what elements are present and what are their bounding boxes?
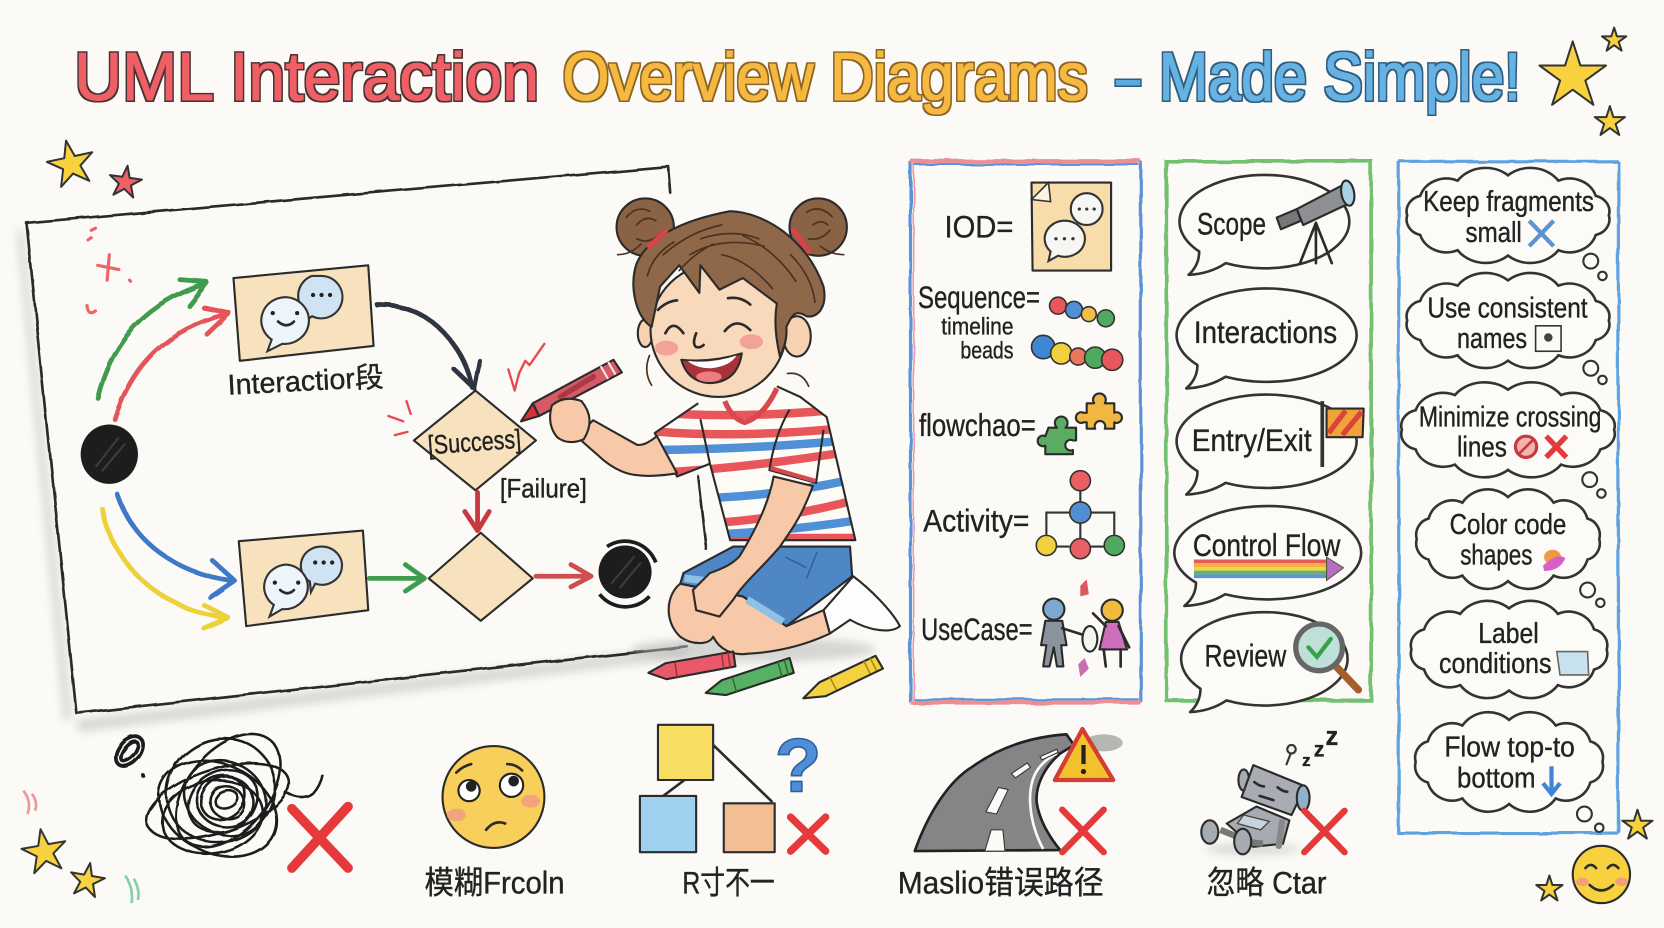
cloud: color code shapes xyxy=(1416,489,1605,607)
green crayon xyxy=(706,658,794,695)
label: R寸不一 xyxy=(682,865,775,901)
bubble: Control Flow xyxy=(1174,506,1361,606)
bubble: Review xyxy=(1181,612,1358,712)
bubble: Interactions xyxy=(1177,288,1357,388)
shorts xyxy=(680,547,852,626)
panel: diagram board xyxy=(17,167,707,732)
timeline beads xyxy=(1032,297,1123,370)
title: – xyxy=(1116,40,1140,115)
interaction fragment 2 xyxy=(239,531,368,626)
cloud: minimize crossing lines: lines xyxy=(1457,431,1507,463)
cloud: keep fragments small: Keep fragments xyxy=(1423,186,1594,218)
cloud: use consistent names: names xyxy=(1457,323,1527,355)
collar xyxy=(725,388,777,422)
head xyxy=(638,263,811,397)
activity row: Activity= xyxy=(923,503,1029,539)
cloud: label conditions: conditions xyxy=(1439,648,1552,680)
sequence row: beads xyxy=(960,338,1013,365)
cloud: use consistent names xyxy=(1407,273,1609,384)
floor crayons xyxy=(648,652,883,698)
hand xyxy=(550,399,590,442)
icon: telescope xyxy=(1277,179,1356,263)
cloud: color code shapes: shapes xyxy=(1460,540,1532,572)
merge diamond xyxy=(429,533,533,621)
floor shadow xyxy=(631,637,876,662)
icon: bottom-right stars and smiley xyxy=(1536,810,1653,903)
flowchart row xyxy=(919,393,1122,454)
arm on knee xyxy=(693,476,813,617)
icon: sleep z letters: z xyxy=(1325,723,1338,751)
cloud: use consistent names: Use consistent xyxy=(1427,292,1588,324)
decision diamond: [Success] xyxy=(427,424,522,460)
panel: definitions xyxy=(911,161,1141,703)
pitfall: tangled scribble xyxy=(110,714,348,875)
pitfall: inconsistent sizes xyxy=(640,724,826,901)
cloud: minimize crossing lines xyxy=(1401,382,1615,498)
drawing arm xyxy=(576,420,677,476)
label: 模糊Frcoln xyxy=(424,865,565,901)
icon: title stars xyxy=(1539,28,1626,135)
cloud: label conditions xyxy=(1411,601,1607,698)
panel frame xyxy=(1399,161,1618,833)
use case row: UseCase= xyxy=(921,611,1033,647)
bubble: Control Flow: Control Flow xyxy=(1193,527,1341,563)
icon: sleep z letters: z xyxy=(1302,751,1311,770)
icon: question mark: ? xyxy=(775,724,821,809)
start node xyxy=(81,424,138,484)
cloud: label conditions: Label xyxy=(1478,618,1539,650)
cloud: flow top to bottom: bottom xyxy=(1457,762,1536,794)
red flow arrow xyxy=(536,565,591,587)
icon: sleep z letters xyxy=(1302,723,1338,770)
icon: warning triangle xyxy=(1055,729,1113,780)
label: 忽略 Ctar xyxy=(1207,865,1327,901)
fragment label: Interactior段 xyxy=(227,362,384,402)
bubble: Entry/Exit xyxy=(1177,395,1364,495)
failure arrow xyxy=(465,492,489,531)
pitfall: ignored start xyxy=(1201,723,1345,901)
cloud: keep fragments small xyxy=(1407,168,1609,280)
icon: sleeping robot xyxy=(1201,745,1310,855)
decision diamond xyxy=(414,391,536,490)
panel: tips thought clouds xyxy=(1399,161,1618,833)
red crayon xyxy=(648,652,735,679)
arrow to decision xyxy=(377,304,480,388)
bubble: Entry/Exit: Entry/Exit xyxy=(1192,422,1312,458)
bubble: Review: Review xyxy=(1204,637,1287,673)
flowchart row: flowchao= xyxy=(919,407,1036,443)
icon: road xyxy=(915,734,1123,851)
icon: worried face xyxy=(443,746,544,848)
failure guard: [Failure] xyxy=(500,474,587,504)
icon: red x xyxy=(1062,810,1104,852)
sequence row: Sequence= xyxy=(918,279,1040,315)
icon: mismatched shapes xyxy=(640,725,775,852)
icon: sleep z letters: z xyxy=(1314,739,1324,762)
icon: red x xyxy=(1304,811,1345,852)
use case row xyxy=(921,579,1129,677)
cloud: flow top to bottom xyxy=(1415,712,1604,832)
icon: red x xyxy=(292,807,348,868)
sequence row xyxy=(918,279,1123,370)
arrows from start xyxy=(98,280,235,628)
right sleeve xyxy=(769,410,824,483)
icon: flag xyxy=(1322,401,1364,467)
shirt xyxy=(647,386,860,540)
interaction fragment 1 xyxy=(233,265,374,361)
label: Maslio错误路径 xyxy=(898,865,1104,901)
bubble: Scope xyxy=(1180,175,1356,275)
child drawing on the board xyxy=(521,198,900,698)
IOD row xyxy=(944,183,1111,271)
cloud: keep fragments small: small xyxy=(1466,217,1522,249)
panel frame xyxy=(911,161,1141,703)
IOD row: IOD= xyxy=(944,209,1013,245)
icon: red x xyxy=(791,817,826,851)
title: Overview Diagrams xyxy=(562,40,1088,115)
end node xyxy=(599,541,656,607)
cloud: color code shapes: Color code xyxy=(1450,509,1566,541)
pitfall: vague naming xyxy=(424,746,565,901)
board sheet xyxy=(17,167,707,732)
red sparkles xyxy=(87,228,131,313)
title: Made Simple! xyxy=(1159,40,1521,115)
panel: key elements speech bubbles xyxy=(1166,161,1371,712)
red crayon in hand xyxy=(521,360,622,421)
legs xyxy=(669,584,830,654)
title: UML Interaction xyxy=(74,40,539,115)
pitfall: wrong path xyxy=(898,729,1123,901)
sock and foot xyxy=(824,576,900,634)
cloud: minimize crossing lines: Minimize crossing xyxy=(1419,402,1601,434)
icon: scribble xyxy=(110,714,323,875)
bubble: Interactions: Interactions xyxy=(1194,314,1337,350)
bubble: Scope: Scope xyxy=(1197,206,1266,242)
icon: magnifier xyxy=(1296,624,1358,690)
actor figures xyxy=(1041,579,1129,677)
activity row xyxy=(923,471,1124,559)
red emphasis marks xyxy=(388,344,544,435)
green flow arrow xyxy=(369,565,424,591)
yellow crayon xyxy=(803,656,883,698)
icon: bottom-left stars and marks xyxy=(19,791,138,903)
cloud: flow top to bottom: Flow top-to xyxy=(1444,732,1575,764)
sequence row: timeline xyxy=(941,313,1013,340)
title xyxy=(74,40,1521,115)
icon: top-left stars xyxy=(43,136,144,198)
icon: rainbow arrow xyxy=(1194,557,1344,580)
hair with buns xyxy=(617,198,847,386)
panel frame xyxy=(1166,161,1371,700)
